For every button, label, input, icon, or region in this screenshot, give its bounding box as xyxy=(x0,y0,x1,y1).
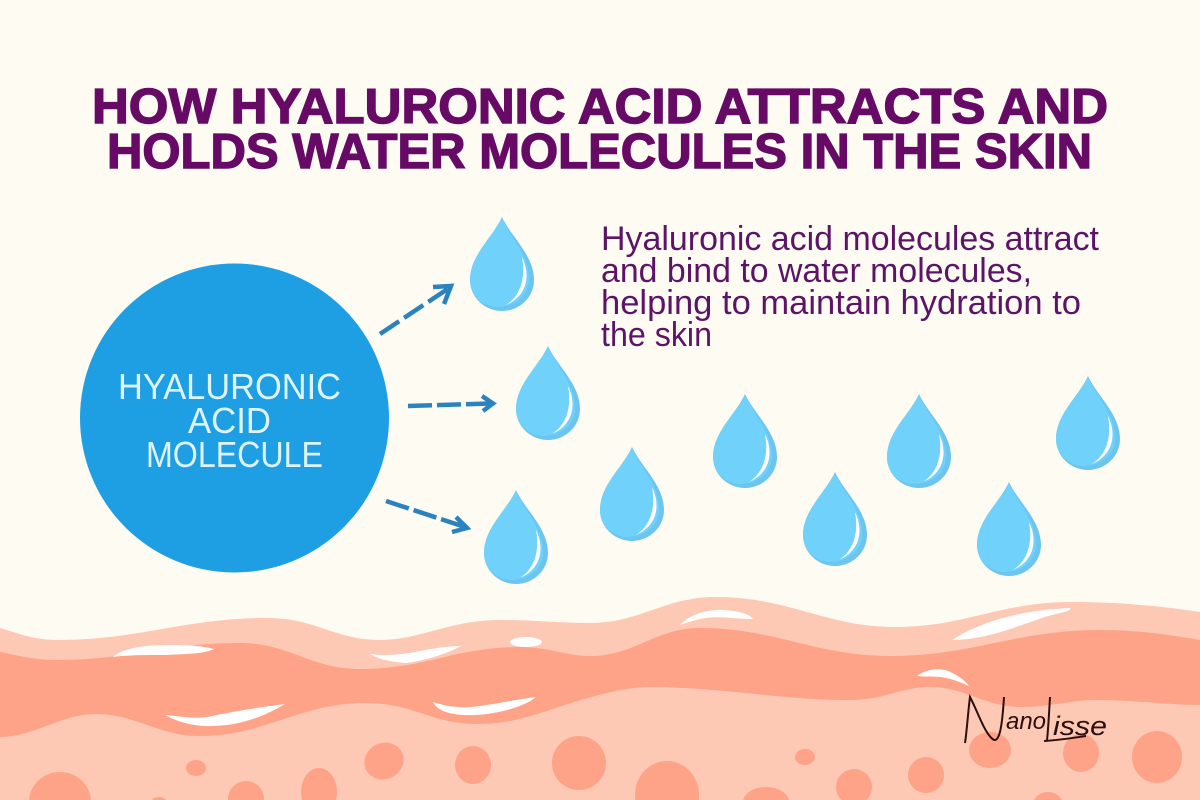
title: HOLDS WATER MOLECULES IN THE SKIN xyxy=(107,125,1092,179)
icon: water drop 7 xyxy=(887,394,951,488)
arrow: molecule to upper drop xyxy=(380,286,451,334)
skin: lower light layer with cells xyxy=(29,731,1182,800)
icon: water drop 8 xyxy=(977,482,1041,576)
signature logo xyxy=(965,697,1107,743)
title xyxy=(92,80,1108,179)
icon: water drop 3 xyxy=(484,490,548,584)
skin: white highlights xyxy=(113,608,1070,726)
title: HOW HYALURONIC ACID ATTRACTS AND xyxy=(92,80,1108,134)
description text xyxy=(601,220,1100,354)
arrow: molecule to lower drop xyxy=(386,501,467,532)
icon: water drop 4 xyxy=(600,447,664,541)
icon: water drop 9 xyxy=(1056,376,1120,470)
signature logo: ano xyxy=(1006,708,1046,735)
description text: the skin xyxy=(601,316,712,354)
description text: and bind to water molecules, xyxy=(601,252,1032,290)
description text: Hyaluronic acid molecules attract xyxy=(601,220,1100,258)
hyaluronic acid molecule circle: ACID xyxy=(188,400,271,441)
skin: upper light layer xyxy=(0,597,1200,800)
hyaluronic acid molecule circle: MOLECULE xyxy=(146,434,323,475)
icon: water drop 5 xyxy=(713,394,777,488)
icon: water drop 2 xyxy=(516,346,580,440)
icon: water drop 6 xyxy=(803,472,867,566)
skin: darker middle layer xyxy=(0,628,1200,737)
skin cross-section xyxy=(0,597,1200,800)
icon: water drop 1 xyxy=(470,217,534,311)
signature logo: isse xyxy=(1053,711,1107,741)
hyaluronic acid molecule circle xyxy=(80,264,389,572)
hyaluronic acid molecule circle: HYALURONIC xyxy=(118,366,341,407)
description text: helping to maintain hydration to xyxy=(601,284,1081,322)
arrow: molecule to middle drop xyxy=(408,396,493,411)
